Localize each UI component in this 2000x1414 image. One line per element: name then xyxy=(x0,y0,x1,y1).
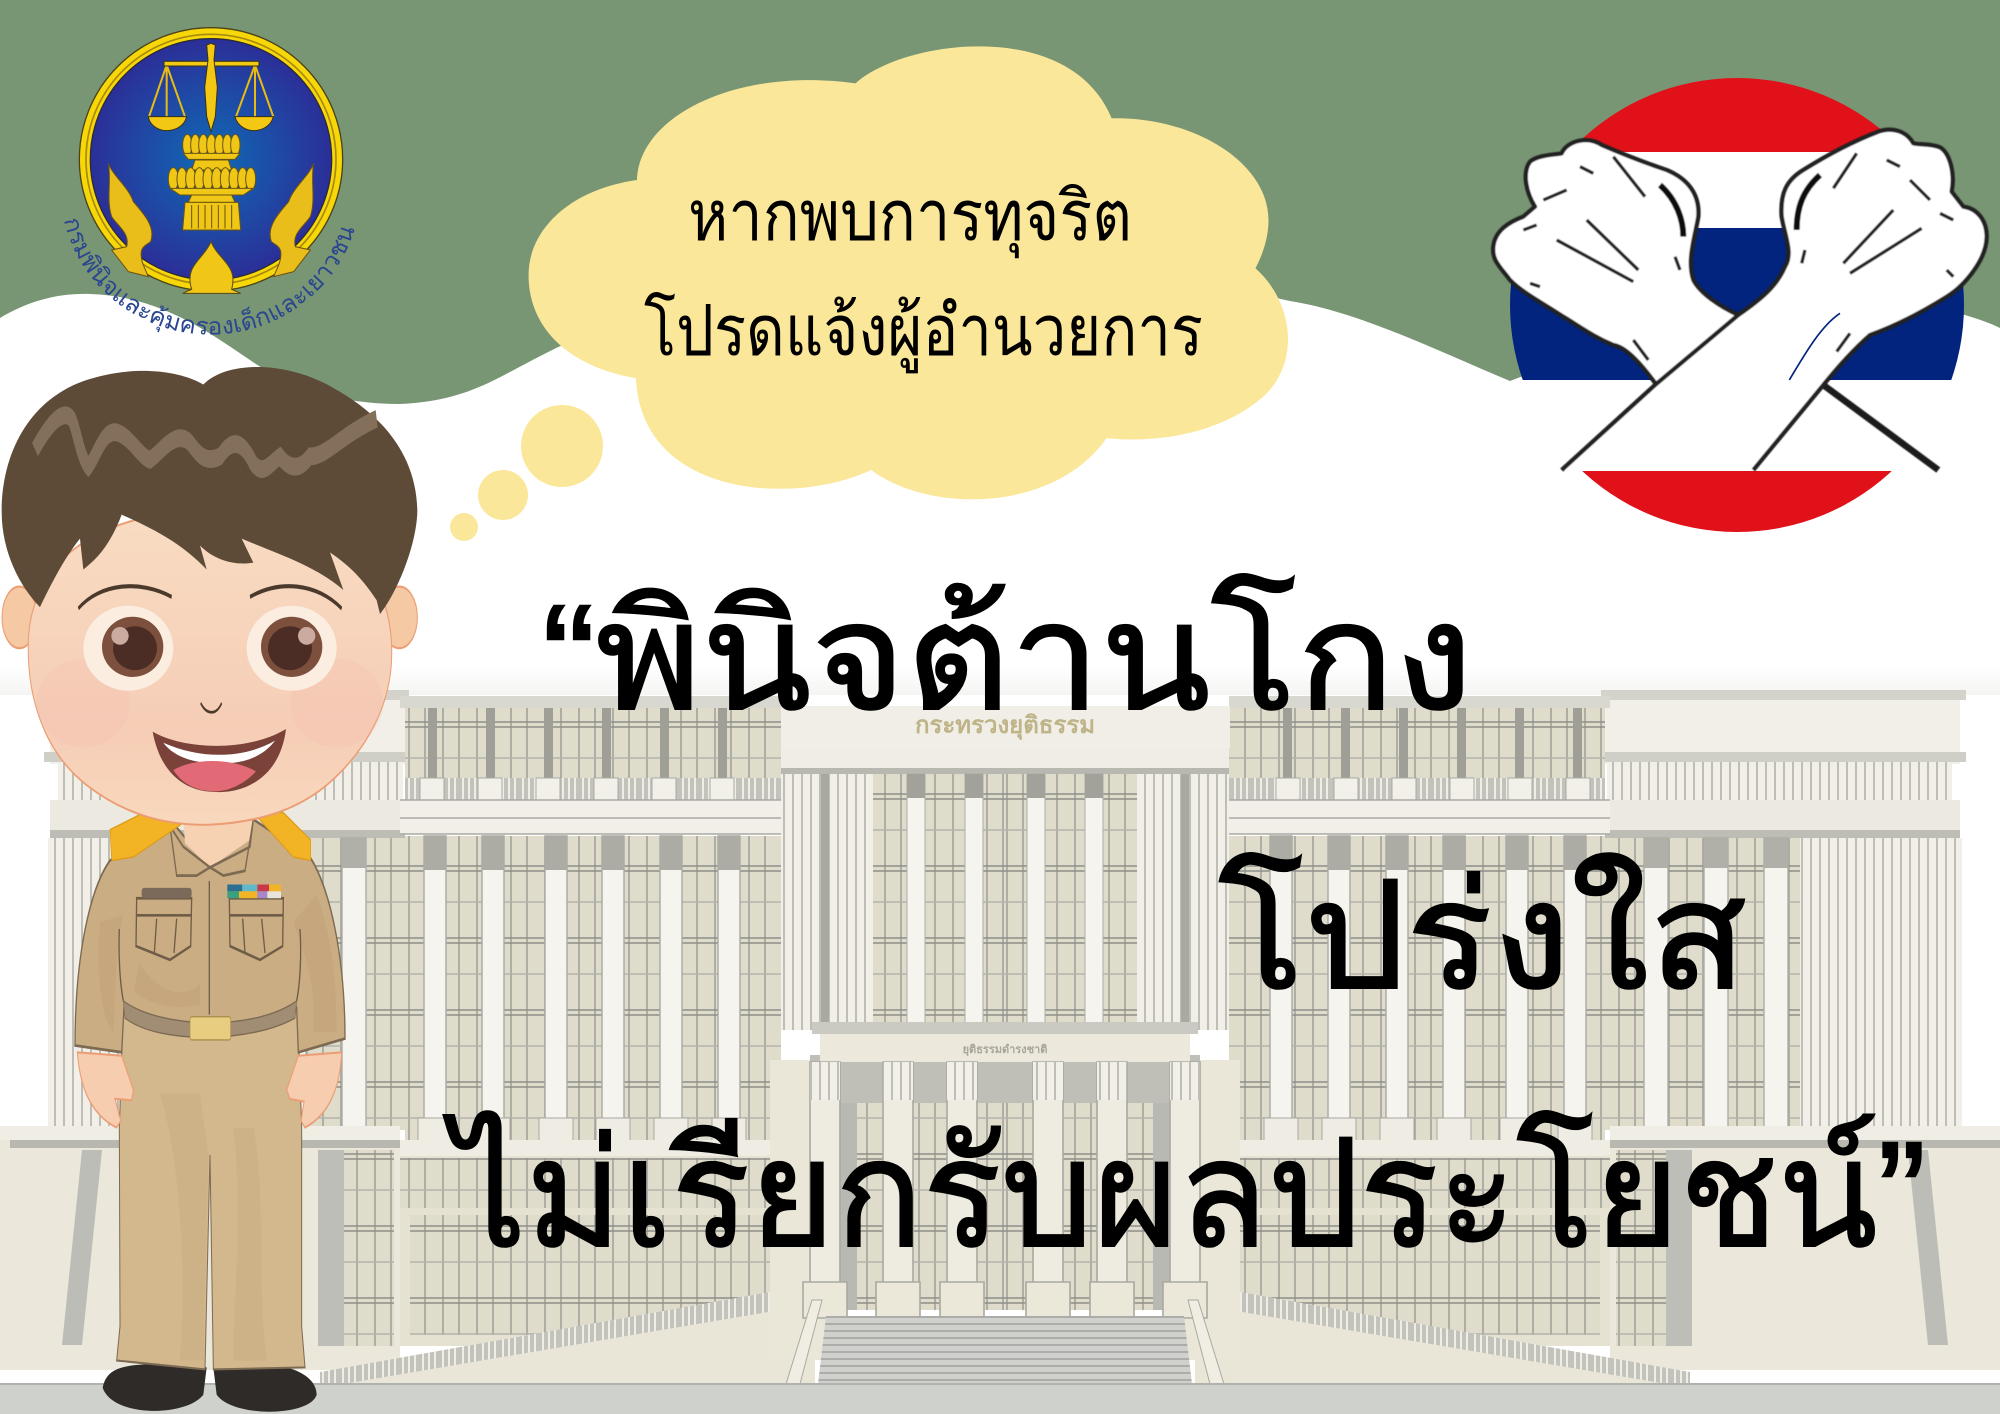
belt buckle xyxy=(190,1017,231,1040)
thought bubble cloud xyxy=(529,46,1288,499)
building lintel text: ยุติธรรมดำรงชาติ xyxy=(963,1043,1047,1057)
eyebrows xyxy=(78,586,342,608)
green header background xyxy=(0,0,2000,420)
agency logo xyxy=(79,28,343,293)
shirt xyxy=(75,819,345,1052)
ribbons xyxy=(227,884,281,898)
thought bubble medium dot xyxy=(478,470,528,520)
shirt shading xyxy=(99,895,337,1032)
hair xyxy=(2,367,417,614)
neck and collar xyxy=(170,816,253,876)
placket and pockets xyxy=(119,881,301,1015)
icon: right naga xyxy=(270,163,314,277)
icon: lotus bud xyxy=(183,242,241,293)
eyes xyxy=(83,606,337,691)
main slogan line 1: “พินิจต้านโกง xyxy=(542,573,1473,741)
ears xyxy=(2,587,417,648)
face xyxy=(28,511,392,825)
main slogan line 3: ไม่เรียกรับผลประโยชน์” xyxy=(443,1110,1926,1278)
icon: left naga xyxy=(108,163,152,277)
nose xyxy=(201,703,222,712)
trouser shading xyxy=(160,1093,267,1361)
bubble text line 1: หากพบการทุจริต xyxy=(688,177,1132,259)
icon: scales of justice xyxy=(148,43,273,132)
hair highlight xyxy=(35,415,377,469)
building sign: กระทรวงยุติธรรม xyxy=(915,712,1095,741)
belt xyxy=(123,1001,297,1037)
thought bubble small dot xyxy=(450,513,478,541)
Thai flag circle with crossed fists xyxy=(1493,70,1987,541)
shoes xyxy=(103,1364,317,1412)
white hand image backdrop xyxy=(1524,380,1954,471)
trousers xyxy=(117,1008,305,1369)
cartoon officer character xyxy=(2,367,417,1412)
hands xyxy=(77,1052,342,1128)
name tag xyxy=(142,888,192,898)
thought bubble large dot xyxy=(521,405,603,487)
flag disc xyxy=(1500,70,1980,541)
cheek blush xyxy=(37,658,383,748)
building illustration xyxy=(0,690,2000,1414)
building top shadow xyxy=(0,665,2000,695)
main slogan line 2: โปร่งใส xyxy=(1218,852,1747,1020)
shoulder boards xyxy=(110,811,311,861)
icon: lotus pedestal xyxy=(168,134,256,230)
icon: crossed fists xyxy=(1493,130,1987,470)
bubble text line 2: โปรดแจ้งผู้อำนวยการ xyxy=(644,291,1203,374)
mouth xyxy=(153,729,286,792)
logo curved agency name: กรมพินิจและคุ้มครองเด็กและเยาวชน xyxy=(64,218,354,335)
